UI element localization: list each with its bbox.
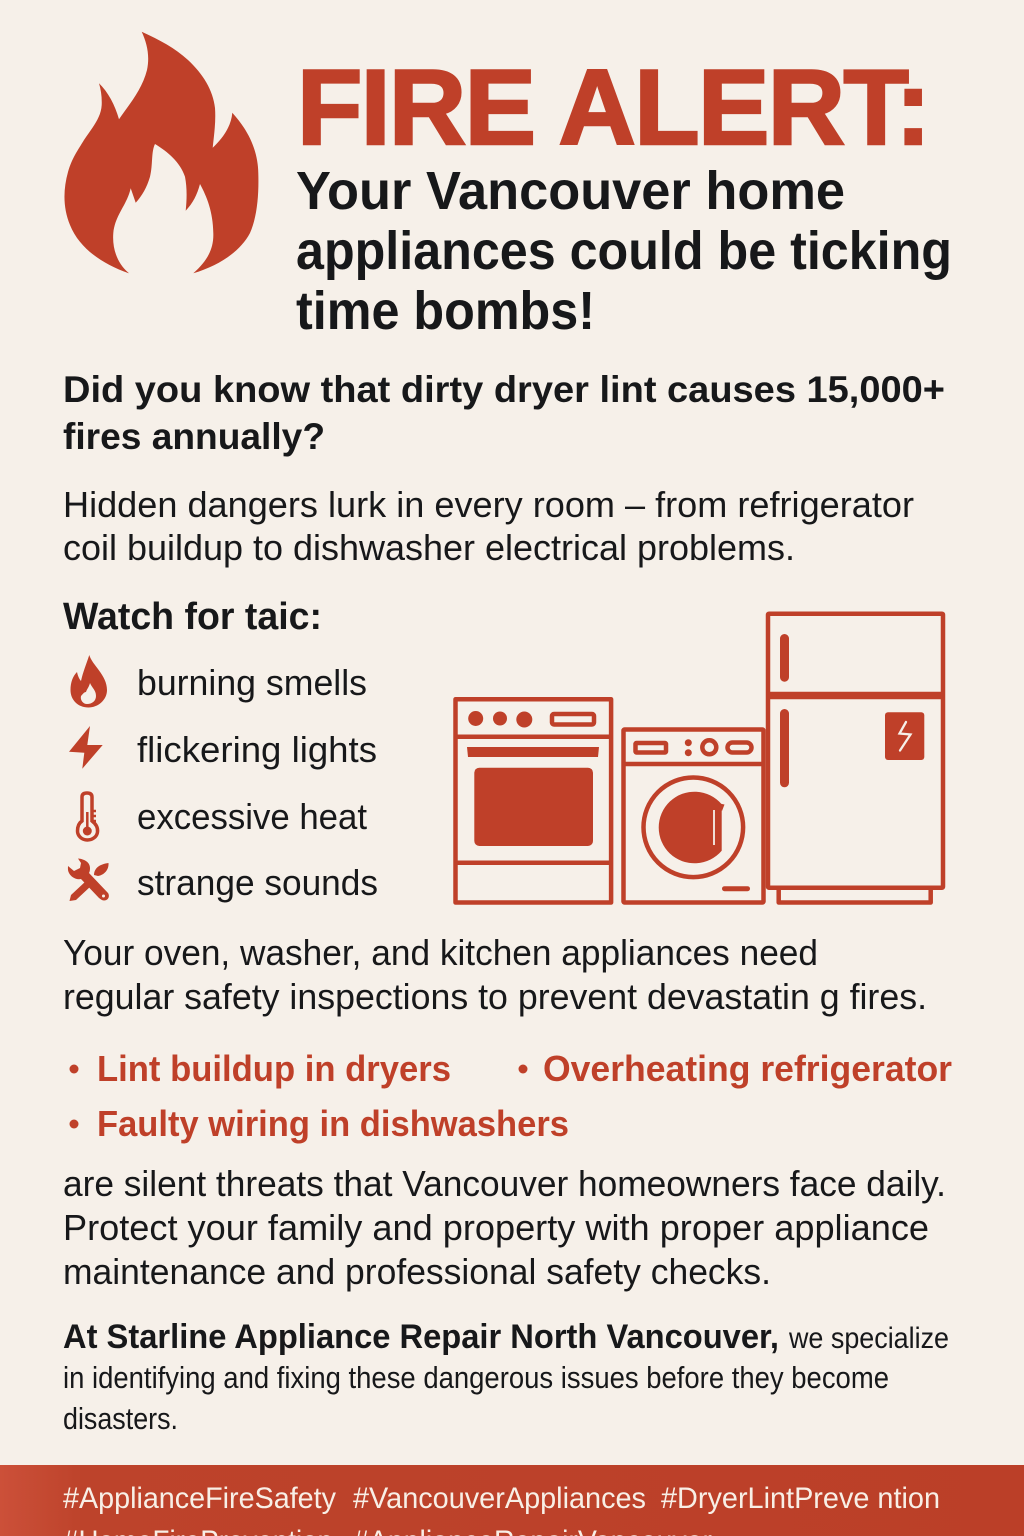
question heading [63,369,945,457]
intro text: Hidden dangers lurk in every room – from refrigerator [63,484,914,525]
intro text: coil buildup to dishwasher electrical problems. [63,527,795,568]
company statement: in identifying and fixing these dangerous issues before they become [63,1360,889,1395]
appliances illustration [456,614,943,902]
icon: lightning bolt [69,726,103,769]
icon: crossed tools [68,858,109,901]
watch heading: Watch for taic: [63,596,322,638]
title: FIRE ALERT: [297,47,932,167]
inspection text: regular safety inspections to prevent devastatin g fires. [63,976,927,1017]
hashtags: #VancouverAppliances [353,1482,646,1515]
red bullet list: Lint buildup in dryers [97,1048,451,1089]
icon: large flame [64,32,258,273]
icon: thermometer [78,793,98,840]
inspection text [63,932,927,1017]
subtitle: Your Vancouver home [296,161,845,221]
company statement: we specialize [788,1322,949,1355]
hashtags: #ApplianceFireSafety [63,1482,336,1515]
threats text: are silent threats that Vancouver homeowners face daily. [63,1163,946,1204]
warning signs list [68,655,378,903]
hashtags: #DryerLintPreve ntion [661,1482,940,1515]
label: flickering lights: flickering lights [137,729,377,770]
icon: oven [456,699,611,902]
intro text [63,484,914,568]
company statement: disasters. [63,1401,178,1436]
subtitle [296,161,952,341]
label: excessive heat: excessive heat [137,796,367,837]
icon: small flame [70,655,107,708]
label: burning smells: burning smells [137,662,367,703]
hashtag footer band [0,1465,1024,1536]
threats text: maintenance and professional safety checks. [63,1251,771,1292]
label: strange sounds: strange sounds [137,862,378,903]
threats text [63,1163,946,1292]
icon: refrigerator [768,614,943,902]
company statement: At Starline Appliance Repair North Vancouver, [63,1318,779,1356]
red bullet list: Faulty wiring in dishwashers [97,1103,569,1144]
question heading: fires annually? [63,416,325,457]
subtitle: appliances could be ticking [296,221,952,281]
red bullet list: Overheating refrigerator [543,1048,952,1089]
red bullet list [70,1048,952,1144]
threats text: Protect your family and property with proper appliance [63,1207,929,1248]
icon: washer [624,730,764,902]
subtitle: time bombs! [296,281,595,341]
hashtags [63,1482,940,1536]
company statement [63,1318,949,1436]
question heading: Did you know that dirty dryer lint causes 15,000+ [63,369,945,410]
inspection text: Your oven, washer, and kitchen appliances need [63,932,818,973]
